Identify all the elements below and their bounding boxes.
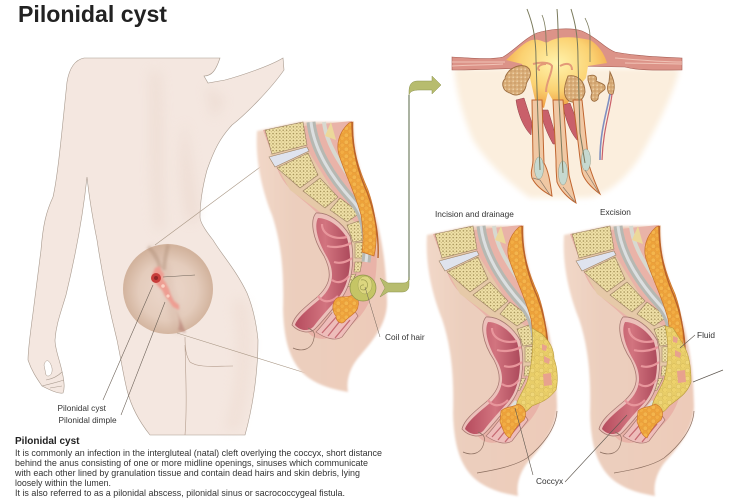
fat yellow xyxy=(516,328,557,415)
text block: description: behind the anus consisting of one or more midline openings, sinuses which communicate xyxy=(15,458,368,468)
panel: incision and drainage section xyxy=(427,225,557,496)
buttock crease xyxy=(477,411,557,473)
text block: description: loosely within the lumen. xyxy=(15,478,111,488)
heading: incision and drainage: Incision and drainage xyxy=(435,209,514,219)
label: coil of hair: Coil of hair xyxy=(385,332,425,342)
title: Pilonidal cyst xyxy=(18,1,167,27)
blood vessels xyxy=(600,94,610,160)
orange fat lower xyxy=(333,296,358,323)
text block: description: It is also referred to as a pilonidal abscess, pilonidal sinus or sacrococcygeal fistula. xyxy=(15,488,345,498)
icon: cyst lesion xyxy=(151,266,179,310)
sebaceous glands xyxy=(503,66,614,102)
figure: woman's back xyxy=(28,58,284,435)
text block: description: with each other lined by granulation tissue and contain dead hairs and skin debris, lying xyxy=(14,468,360,478)
panel: hair follicle cross-section xyxy=(452,9,682,203)
label: fluid xyxy=(680,330,715,348)
text block: description: It is commonly an infection in the intergluteal (natal) cleft overlying the coccyx, short distance xyxy=(15,448,382,458)
panel: excision section xyxy=(564,225,694,496)
icon: coil of hair xyxy=(350,275,376,301)
buttock crease xyxy=(185,337,233,435)
label: coccyx: Coccyx xyxy=(536,476,564,486)
hand xyxy=(42,372,64,388)
arrector muscles xyxy=(516,98,584,144)
text block: description: Pilonidal cyst xyxy=(15,436,80,447)
panel: sagittal section with coil of hair xyxy=(257,121,387,392)
backdrop xyxy=(454,68,680,198)
hair bulbs xyxy=(534,149,590,185)
fat orange lower xyxy=(500,404,526,438)
abscess with sinuses xyxy=(506,37,607,112)
label: fluid: Fluid xyxy=(697,330,715,340)
connector lines: circle to section xyxy=(155,165,328,380)
label: pilonidal dimple: Pilonidal dimple xyxy=(58,415,117,425)
drain line xyxy=(693,370,723,382)
text block: description xyxy=(14,436,382,498)
label: coccyx xyxy=(515,408,627,486)
leader lines: body xyxy=(103,275,195,415)
fat orange lower xyxy=(637,404,663,438)
skin layer xyxy=(452,29,682,70)
torso and arm silhouette xyxy=(28,58,284,435)
back shading xyxy=(150,70,250,430)
buttock crease xyxy=(614,411,694,473)
hairs xyxy=(527,9,590,173)
label: pilonidal cyst: Pilonidal cyst xyxy=(58,403,107,413)
magnified circle: sacral region xyxy=(123,244,213,334)
heading: excision: Excision xyxy=(600,207,631,217)
fat yellow xyxy=(651,326,691,414)
label: coil of hair xyxy=(365,287,425,342)
follicles xyxy=(531,100,600,203)
follicle roots xyxy=(533,170,599,202)
arrow: section to follicle detail xyxy=(380,76,441,297)
